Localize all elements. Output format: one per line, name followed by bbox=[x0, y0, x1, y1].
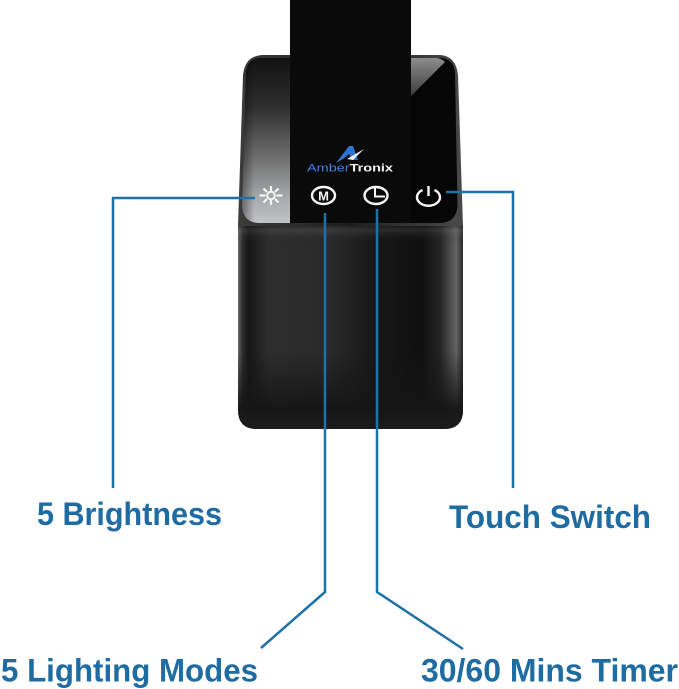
label: 5 Brightness: 5 Brightness bbox=[37, 496, 222, 532]
glass touch panel bbox=[238, 55, 463, 226]
collar below glass bbox=[238, 224, 463, 244]
icon: mode M: M bbox=[318, 188, 329, 203]
label: 30/60 Mins Timer: 30/60 Mins Timer bbox=[421, 652, 678, 688]
logo wordmark: Amber Tronix bbox=[307, 162, 394, 174]
callout line: touch switch bbox=[446, 192, 513, 488]
logo: AmberTronix bbox=[307, 146, 394, 174]
panel glass bbox=[242, 58, 458, 223]
logo mark bbox=[336, 146, 364, 163]
icon: power bbox=[417, 186, 440, 206]
icon: brightness sun bbox=[260, 186, 282, 205]
panel rim bbox=[238, 55, 463, 226]
callout line: timer bbox=[377, 209, 463, 649]
right glass reflection bbox=[410, 58, 445, 97]
lamp base body bbox=[238, 224, 463, 429]
lamp neck bbox=[290, 0, 411, 223]
icon: mode M bbox=[312, 187, 335, 204]
icon: timer clock bbox=[364, 187, 388, 204]
callout line: lighting modes bbox=[261, 213, 325, 648]
callout line: brightness bbox=[113, 198, 255, 488]
left reflection edge shade bbox=[242, 58, 292, 223]
left glass reflection bbox=[242, 58, 292, 223]
label: Touch Switch: Touch Switch bbox=[449, 499, 651, 535]
label: 5 Lighting Modes: 5 Lighting Modes bbox=[1, 652, 258, 688]
